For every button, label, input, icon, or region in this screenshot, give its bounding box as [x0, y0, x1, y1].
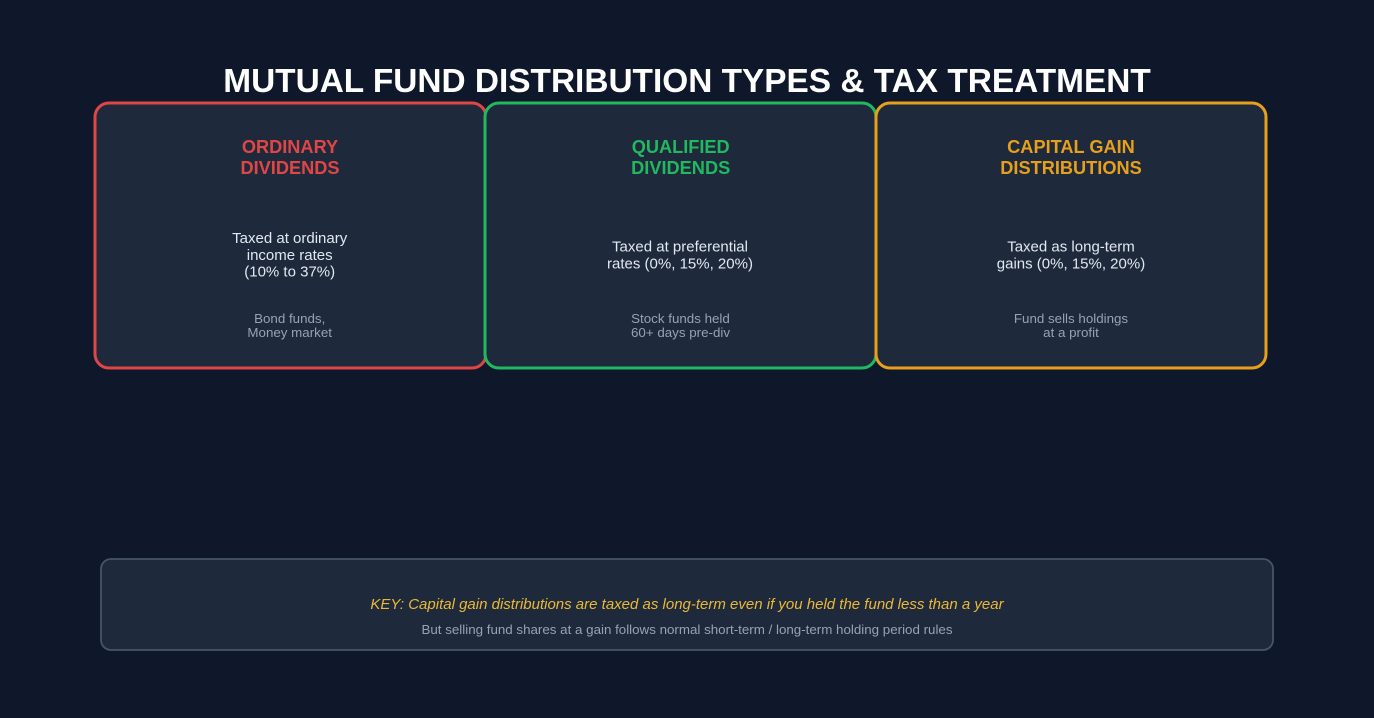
panel: ordinary dividends	[95, 103, 486, 368]
examples: qualified: Stock funds held	[631, 311, 730, 326]
callout: key takeaway	[101, 559, 1273, 650]
heading: ordinary dividends: ORDINARY	[242, 137, 338, 157]
title: MUTUAL FUND DISTRIBUTION TYPES & TAX TREATMENT	[223, 63, 1151, 100]
examples: ordinary: Bond funds,	[254, 311, 325, 326]
tax treatment: ordinary: income rates	[247, 247, 333, 264]
examples: capital gains: Fund sells holdings	[1014, 311, 1128, 326]
tax treatment: capital gains: Taxed as long-term	[1007, 238, 1135, 256]
heading: capital gain distributions: CAPITAL GAIN	[1007, 137, 1135, 157]
tax treatment: qualified: rates (0%, 15%, 20%)	[607, 255, 753, 272]
heading: qualified dividends: QUALIFIED	[632, 137, 730, 157]
tax treatment: ordinary: Taxed at ordinary	[232, 230, 348, 247]
tax treatment: ordinary: (10% to 37%)	[244, 264, 335, 281]
tax treatment: capital gains: gains (0%, 15%, 20%)	[997, 255, 1145, 272]
secondary note: But selling fund shares at a gain follows normal short-term / long-term holding period rules	[421, 622, 953, 637]
examples: capital gains: at a profit	[1043, 325, 1099, 340]
key note: KEY: Capital gain distributions are taxed as long-term even if you held the fund less than a year	[370, 596, 1005, 613]
tax treatment: qualified: Taxed at preferential	[612, 238, 748, 256]
heading: ordinary dividends: DIVIDENDS	[240, 158, 340, 178]
examples: qualified: 60+ days pre-div	[631, 325, 730, 340]
panel: capital gain distributions	[876, 103, 1266, 368]
panel: qualified dividends	[485, 103, 876, 368]
heading: capital gain distributions: DISTRIBUTIONS	[1000, 158, 1142, 178]
heading: qualified dividends: DIVIDENDS	[631, 158, 730, 178]
examples: ordinary: Money market	[247, 325, 332, 340]
